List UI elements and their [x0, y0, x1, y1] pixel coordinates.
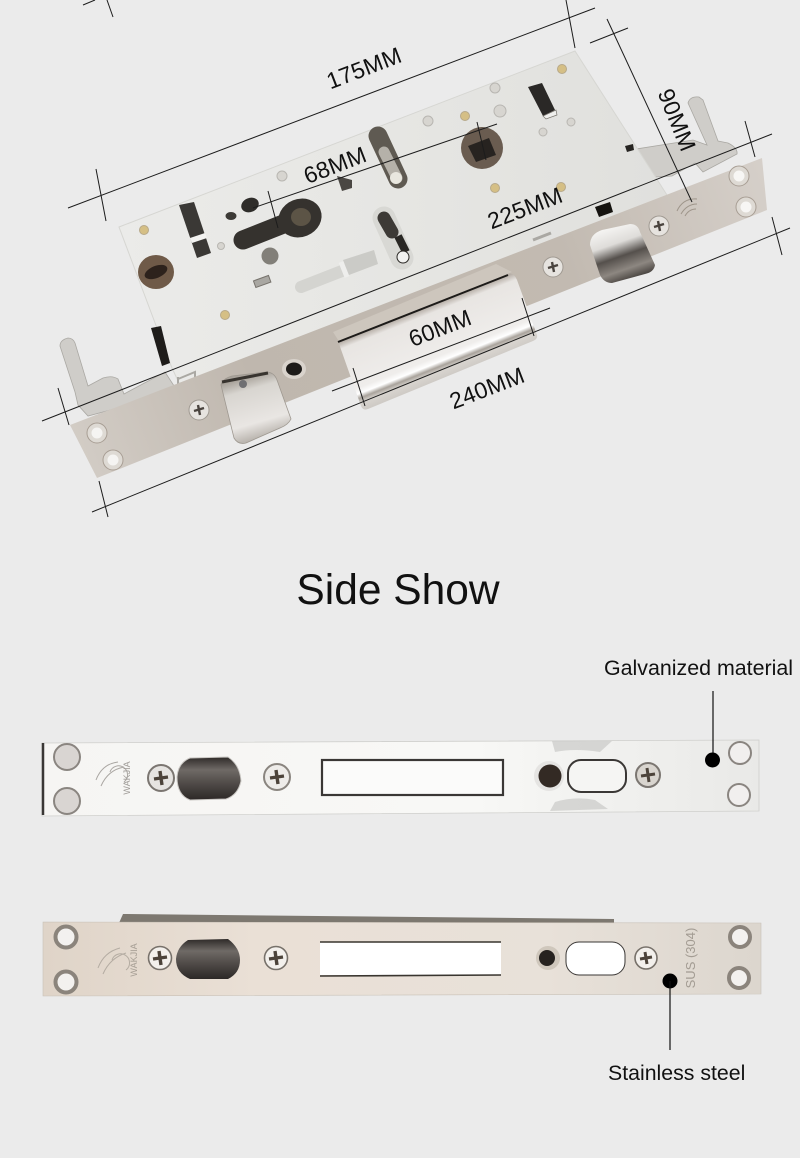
- rivets: [56, 926, 750, 992]
- faceplate screws: [189, 216, 669, 420]
- screws: [148, 946, 657, 970]
- steel rivets: [218, 83, 575, 250]
- faceplate dark hole: [282, 359, 306, 379]
- left edge: [42, 743, 44, 815]
- chrome bolt right: [590, 224, 655, 283]
- icon: left hook bolt: [60, 338, 178, 416]
- bolt slot: [568, 760, 626, 792]
- panel: galvanized faceplate: [42, 740, 759, 816]
- callout label: Galvanized material: [604, 656, 793, 680]
- plate: [42, 740, 759, 816]
- vertical slot lower: [384, 218, 409, 263]
- dimension: 90MM: [590, 19, 701, 202]
- latch slot: [322, 760, 503, 795]
- faceplate logo: [677, 199, 697, 216]
- latch bolt centre: [338, 274, 537, 410]
- logo text: WAKJIA: [129, 943, 139, 977]
- latch slot: [320, 942, 501, 975]
- logo text: WAKJIA: [122, 761, 132, 795]
- callout: stainless steel: [608, 974, 745, 1085]
- label 240MM: 240MM: [446, 362, 528, 414]
- dimension: 225MM: [42, 121, 772, 425]
- faceplate mounting holes: [87, 166, 756, 470]
- sliding slot: [301, 250, 378, 287]
- panel: stainless faceplate: [43, 914, 761, 996]
- dimension: 68MM: [253, 122, 497, 228]
- callout leader: [712, 691, 714, 760]
- case strip: [119, 914, 614, 923]
- icon: right hook bolt: [630, 97, 737, 178]
- callout leader: [669, 981, 671, 1050]
- black window: [595, 202, 613, 217]
- label 68MM: 68MM: [300, 141, 370, 189]
- small window: [625, 144, 634, 152]
- dimension: 240MM: [92, 217, 790, 517]
- bolt slot: [566, 942, 625, 975]
- lock case body: [119, 51, 667, 385]
- faceplate: [70, 158, 767, 478]
- tab left: [178, 372, 195, 384]
- dark hole: [534, 761, 564, 791]
- vertical slot left: [179, 202, 211, 258]
- dimension: 175MM: [68, 0, 595, 221]
- cylinder keyhole: [243, 192, 328, 244]
- spindle hole right: [461, 127, 503, 169]
- plate: [43, 922, 761, 996]
- logo: [98, 948, 130, 974]
- small bolt left: [221, 372, 291, 443]
- logo: [96, 762, 128, 786]
- dimension: 60MM: [332, 298, 550, 406]
- reflection: [550, 741, 612, 811]
- dark hole: [536, 946, 560, 970]
- callout dot: [705, 752, 720, 768]
- plate marking: SUS (304): [683, 928, 698, 988]
- deadbolt: [177, 757, 241, 800]
- strike slot surround: [333, 264, 512, 343]
- vertical slot centre: [378, 136, 402, 184]
- vertical slot upper right: [528, 83, 557, 119]
- rivets: [54, 742, 751, 814]
- small holes: [151, 176, 352, 366]
- callout: galvanized material: [604, 656, 793, 768]
- tab right: [533, 233, 551, 240]
- spindle hole left: [138, 255, 174, 289]
- label 175MM: 175MM: [323, 42, 405, 94]
- callout label: Stainless steel: [608, 1061, 745, 1085]
- label 90MM: 90MM: [653, 85, 701, 155]
- screws: [148, 763, 660, 791]
- lock mortise diagram: [42, 0, 790, 517]
- label 225MM: 225MM: [484, 182, 566, 234]
- latch slot edges: [320, 942, 501, 976]
- heading: Side Show: [296, 567, 500, 614]
- deadbolt: [176, 939, 240, 979]
- brass rivets: [140, 64, 566, 320]
- label 60MM: 60MM: [405, 304, 475, 352]
- callout dot: [662, 974, 678, 988]
